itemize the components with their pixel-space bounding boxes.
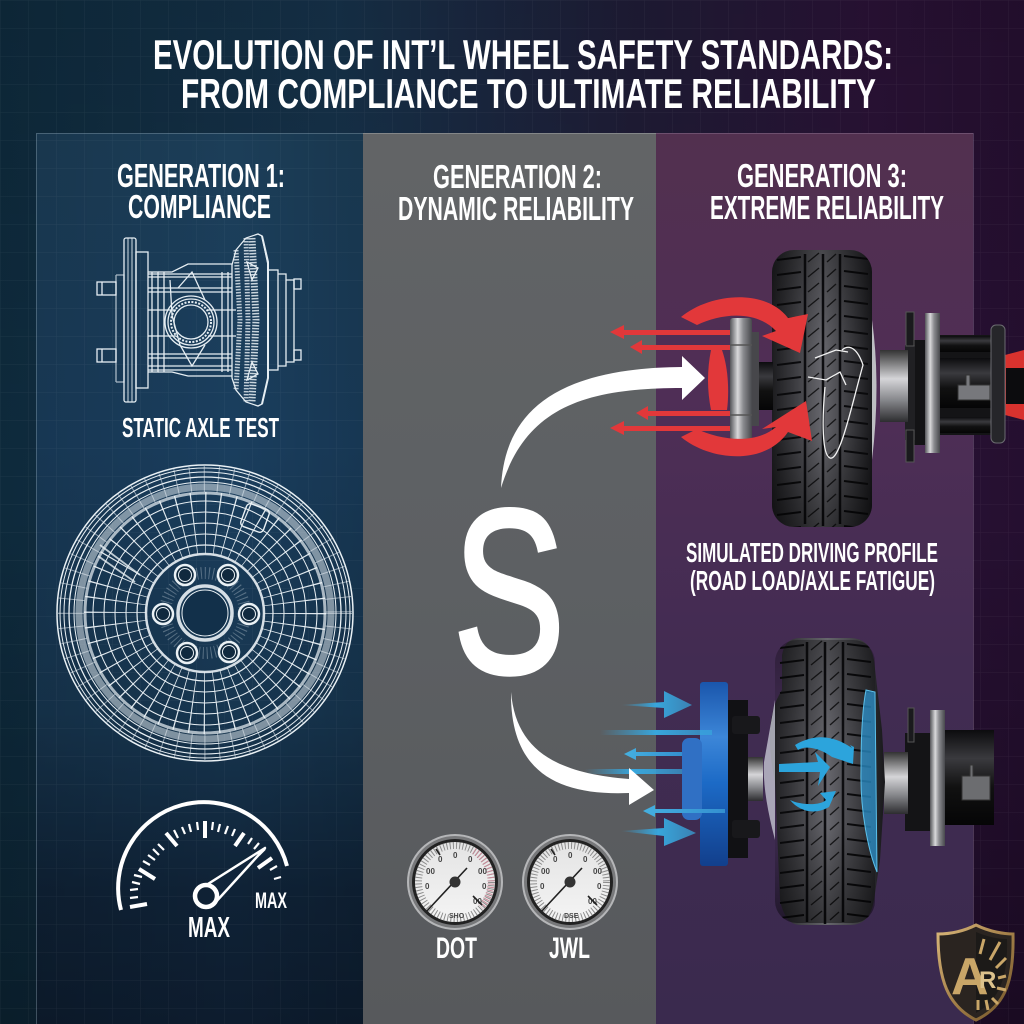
logo: AR shield bbox=[938, 925, 1013, 1020]
heading: generation 1 bbox=[117, 157, 285, 225]
gauge: JWL: 00 bbox=[541, 867, 550, 876]
gauge: JWL: 00 bbox=[588, 897, 597, 906]
panel: generation 3 extreme reliability bbox=[656, 133, 974, 1024]
gauge: JWL: 0 bbox=[540, 882, 545, 891]
panel: generation 2 dynamic reliability bbox=[363, 133, 656, 1024]
wheel assembly: bottom blue bbox=[585, 638, 994, 925]
label: DOT: DOT bbox=[436, 932, 477, 965]
logo letters: A bbox=[951, 948, 989, 1006]
gauge: DOT: 0 bbox=[425, 882, 430, 891]
heading: generation 1: COMPLIANCE bbox=[128, 188, 271, 225]
rear axle hardware bbox=[880, 312, 1024, 462]
blue curved arrows on tyre bbox=[779, 737, 854, 811]
blue force arrows bbox=[585, 691, 725, 846]
gauge: JWL bbox=[523, 835, 617, 929]
blueprint: static axle bbox=[97, 234, 301, 406]
arrow: white to generation 3 bottom bbox=[511, 692, 654, 805]
gauge: DOT: 0 bbox=[468, 855, 473, 864]
label: max right: MAX bbox=[255, 888, 287, 913]
big S: S bbox=[453, 462, 565, 722]
gauge: JWL: 0 bbox=[553, 855, 558, 864]
gauge: JWL: DSE bbox=[564, 913, 579, 920]
gauge: max bbox=[118, 802, 287, 944]
heading: generation 1: GENERATION 1: bbox=[117, 157, 285, 194]
title bbox=[153, 31, 893, 117]
gauge: JWL: 00 bbox=[593, 867, 602, 876]
gauge: DOT: 00 bbox=[426, 867, 435, 876]
heading: generation 2: DYNAMIC RELIABILITY bbox=[398, 190, 634, 227]
translucent blue overlay bbox=[861, 690, 877, 872]
heading: generation 2 bbox=[398, 158, 634, 227]
heading: generation 3: GENERATION 3: bbox=[737, 157, 907, 194]
tyre bbox=[764, 638, 885, 925]
logo letters: R bbox=[979, 967, 996, 994]
gauge: DOT: 00 bbox=[473, 897, 482, 906]
label: static axle test: STATIC AXLE TEST bbox=[122, 412, 279, 443]
gauge: DOT: 00 bbox=[478, 867, 487, 876]
gauge: DOT: 0 bbox=[438, 855, 443, 864]
gauge: JWL: 0 bbox=[583, 855, 588, 864]
gauge: JWL: 0 bbox=[597, 882, 602, 891]
label: JWL: JWL bbox=[549, 932, 590, 965]
rear axle hardware bbox=[884, 708, 994, 846]
blue hub bbox=[682, 682, 763, 866]
arrow: white to generation 3 top bbox=[501, 356, 705, 488]
label: max centre: MAX bbox=[188, 912, 230, 944]
blueprint: wheel wireframe bbox=[57, 465, 353, 761]
gauge: DOT bbox=[408, 835, 502, 929]
gauge: JWL: 0 bbox=[568, 851, 573, 860]
caption: simulated driving profile bbox=[686, 537, 938, 596]
heading: generation 2: GENERATION 2: bbox=[433, 158, 602, 195]
front hub bbox=[730, 318, 773, 440]
tyre bbox=[772, 250, 876, 527]
heading: generation 3 bbox=[710, 157, 944, 226]
wheel assembly: top red bbox=[610, 250, 1024, 527]
gauge: DOT: 0 bbox=[482, 882, 487, 891]
red force arrows bbox=[610, 297, 812, 456]
crack scribble bbox=[808, 347, 863, 458]
gauge: DOT: 0 bbox=[453, 851, 458, 860]
panel: generation 1 compliance bbox=[36, 133, 363, 1024]
gauge: DOT: SHO bbox=[449, 913, 465, 920]
